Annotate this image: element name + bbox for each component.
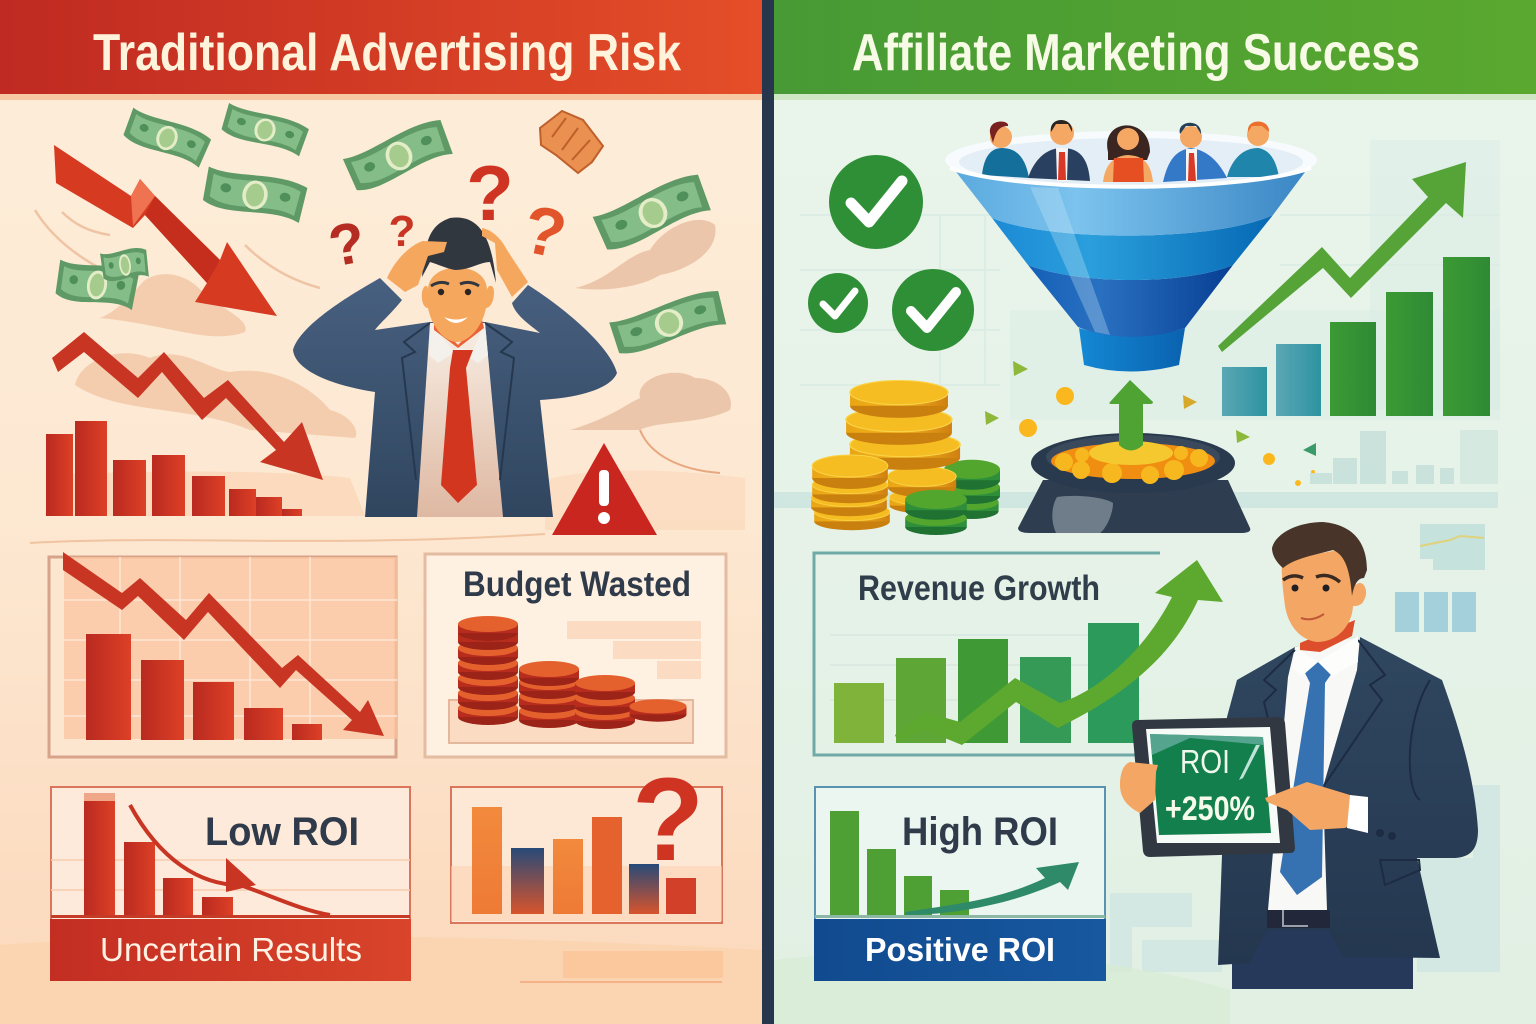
faded mini bars [1310,430,1498,484]
conversion funnel with people [945,120,1317,372]
card: declining chart [49,552,397,757]
banner: positive ROI: Positive ROI [865,931,1055,968]
divider [762,0,774,1024]
stressed businessman [293,218,617,517]
arrow: chart decline [63,552,384,736]
wind swooshes and clouds [35,210,745,530]
growth bar chart with arrow [1218,162,1490,416]
panel: traditional advertising risk [0,0,762,1024]
hand holding tablet [1120,762,1158,813]
heading: revenue growth: Revenue Growth [858,569,1100,608]
hands [387,241,447,292]
card: low ROI [50,787,411,981]
bar chart: declining bars [46,421,302,516]
card: uncertain bars [451,754,722,923]
shirt [417,323,503,517]
icon: check marks [808,155,974,351]
floating gold dots and triangles [985,361,1316,486]
flying money bills [55,103,729,359]
neck [1300,620,1355,652]
arrow: revenue up [895,560,1223,745]
heading bar: traditional advertising risk [0,0,762,100]
red coin stacks [458,616,686,729]
card: budget wasted [425,554,726,757]
neck [434,320,484,348]
shirt [1268,637,1360,910]
confident businessman with tablet [1120,522,1478,989]
question marks: ? [324,209,370,280]
tablet: ROI [1180,743,1230,780]
panel: affiliate marketing success [774,0,1536,1024]
arrow: up trend [1218,162,1466,352]
faded chart decorations [1395,524,1485,632]
people in funnel [982,120,1279,182]
coin stacks [811,380,1000,535]
belt [1267,910,1330,928]
funnel body [950,168,1311,372]
suit body [293,278,617,517]
hair [422,218,496,283]
head [1282,548,1366,642]
heading: budget wasted: Budget Wasted [463,565,691,604]
trousers [1232,925,1413,989]
pointing hand [1265,782,1355,830]
icon: fist [540,111,603,173]
heading: low ROI: Low ROI [205,810,359,854]
head [422,268,494,342]
banner: uncertain results [50,919,411,981]
tablet: +250% [1165,790,1255,828]
card: high ROI [814,787,1106,981]
tie [441,350,477,503]
collar [429,323,488,363]
heading bar: traditional advertising risk: Traditional Advertising Risk [93,24,681,82]
hair [1272,522,1367,596]
heading bar: affiliate marketing success [774,0,1536,100]
suit jacket [1218,637,1478,965]
arrow: zigzag falling arrow [52,332,323,480]
collar [1292,636,1358,676]
tie [1280,662,1332,895]
pot of gold with up arrow [1018,380,1250,533]
question marks: ? [516,191,573,274]
card: revenue growth [814,553,1223,755]
question marks: ? [389,207,415,256]
heading: high ROI: High ROI [902,810,1058,854]
arrow: up from pot [1109,380,1153,450]
question marks [324,149,573,280]
icon: warning triangle [552,443,657,535]
question marks: ? [466,149,514,237]
cuff [1347,795,1368,833]
banner: positive ROI [814,919,1106,981]
funnel rim [945,131,1317,189]
arrow: large falling red arrow [54,145,277,316]
tablet [1132,717,1295,857]
banner: uncertain results: Uncertain Results [100,931,362,968]
question mark: ? [632,754,704,886]
heading bar: affiliate marketing success: Affiliate Marketing Success [852,24,1420,82]
